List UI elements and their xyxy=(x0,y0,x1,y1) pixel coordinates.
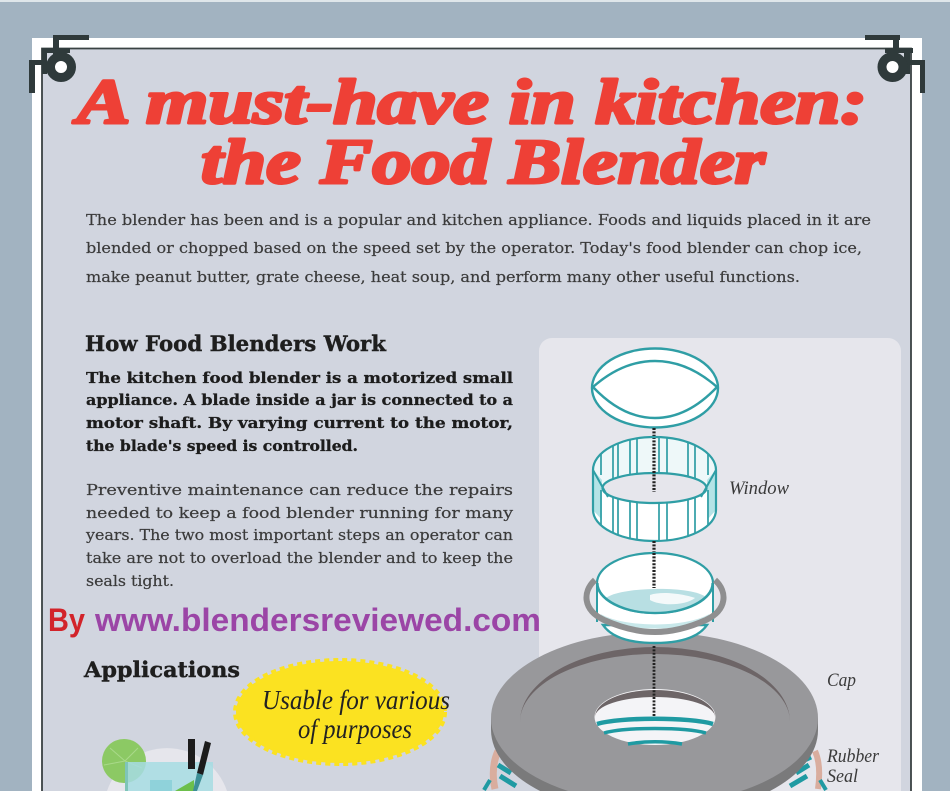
intro text block: The blender has been and is a popular and kitchen appliance. Foods and liquids placed in it are xyxy=(86,211,871,229)
icon: top-left corner ornament xyxy=(29,35,89,93)
maintenance paragraph: Preventive maintenance can reduce the repairs xyxy=(86,481,513,499)
intro text block: make peanut butter, grate cheese, heat soup, and perform many other useful functions. xyxy=(86,268,800,286)
label: Rubber Seal xyxy=(826,746,880,787)
callout: yellow burst: of purposes xyxy=(298,714,412,744)
bold paragraph: appliance. A blade inside a jar is connected to a xyxy=(86,391,513,409)
title: the Food Blender xyxy=(201,127,766,197)
title: A must-have in kitchen: xyxy=(72,67,867,137)
heading: Applications: Applications xyxy=(83,657,240,682)
label: Rubber Seal: Seal xyxy=(827,766,858,787)
bold paragraph: The kitchen food blender is a motorized small xyxy=(86,369,513,387)
maintenance paragraph: needed to keep a food blender running for many xyxy=(86,504,514,522)
byline: www.blendersreviewed.com xyxy=(94,602,541,638)
icon: drink glass with lime xyxy=(102,739,227,791)
line: middle dotted axis xyxy=(652,541,656,590)
icon: top-right corner ornament xyxy=(865,35,925,93)
callout: yellow burst: Usable for various xyxy=(262,685,450,715)
callout: yellow burst xyxy=(236,661,450,763)
intro text block xyxy=(86,211,871,286)
bold paragraph xyxy=(86,369,513,455)
label: Window: Window xyxy=(729,478,789,499)
icon: small cup with gasket xyxy=(586,553,724,643)
byline: By xyxy=(48,602,85,638)
icon: window ring xyxy=(593,437,716,541)
bold paragraph: motor shaft. By varying current to the motor, xyxy=(86,414,513,432)
line: upper dotted axis xyxy=(652,428,656,494)
label: Cap: Cap xyxy=(827,670,856,691)
bold paragraph: the blade's speed is controlled. xyxy=(86,437,358,455)
icon: grey cap xyxy=(491,632,818,791)
intro text block: blended or chopped based on the speed set by the operator. Today's food blender can chop ice, xyxy=(86,239,862,257)
maintenance paragraph: take are not to overload the blender and to keep the xyxy=(86,549,513,567)
label: Rubber Seal: Rubber xyxy=(826,746,880,767)
maintenance paragraph: years. The two most important steps an operator can xyxy=(85,526,513,544)
icon: teal base stripes xyxy=(484,751,826,790)
icon: lid xyxy=(592,348,718,428)
maintenance paragraph: seals tight. xyxy=(86,572,174,590)
title xyxy=(72,67,867,197)
panel: blender diagram xyxy=(484,338,901,791)
heading: How Food Blenders Work: How Food Blenders Work xyxy=(85,331,386,356)
maintenance paragraph xyxy=(85,481,514,590)
